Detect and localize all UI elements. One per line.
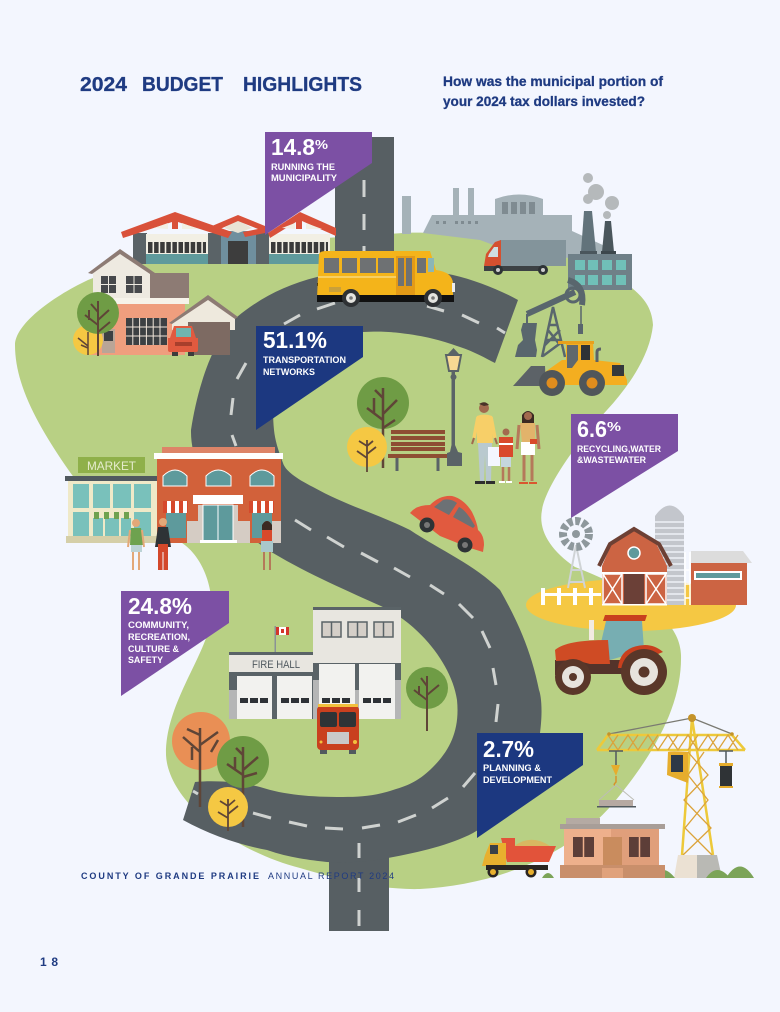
banner: 6.6% recycling, water and wastewater: &WASTEWATER	[577, 455, 646, 466]
title: BUDGET	[142, 74, 223, 96]
green dollar-shaped land	[15, 233, 681, 889]
shed	[685, 551, 752, 605]
banner: 2.7% planning and development: PLANNING &	[483, 763, 541, 774]
park bench	[388, 430, 447, 471]
shoppers at market	[128, 518, 273, 570]
family of three	[472, 402, 539, 484]
road centre dashes	[193, 180, 505, 926]
house under construction	[560, 818, 665, 878]
winding road	[183, 137, 542, 931]
market store: MARKET	[87, 459, 137, 473]
page number: 18	[40, 955, 58, 969]
yellow wheel loader	[513, 341, 627, 396]
red beetle car	[410, 496, 484, 552]
title: 2024	[80, 74, 128, 96]
banner: 24.8% community, recreation, culture and safety: CULTURE &	[128, 644, 179, 655]
banner: 14.8% running the municipality: RUNNING THE	[271, 162, 335, 173]
fire truck	[317, 704, 359, 754]
park trees	[347, 377, 409, 472]
footer report line: COUNTY OF GRANDE PRAIRIE	[81, 871, 259, 881]
banner: 6.6% recycling, water and wastewater: 6.6	[577, 416, 607, 442]
banner: 14.8% running the municipality	[265, 132, 372, 235]
banner: 51.1% transportation networks: NETWORKS	[263, 367, 315, 378]
banner: 24.8% community, recreation, culture and safety: COMMUNITY,	[128, 620, 189, 631]
title: HIGHLIGHTS	[243, 74, 362, 96]
ground bushes	[542, 866, 754, 878]
banner: 14.8% running the municipality: MUNICIPALITY	[271, 173, 338, 184]
banner: 2.7% planning and development	[477, 733, 583, 838]
street lamp	[446, 348, 462, 466]
brick shops building	[154, 447, 283, 543]
footer report line: ANNUAL REPORT 2024	[268, 871, 394, 881]
banner: 24.8% community, recreation, culture and safety: 24.8%	[128, 593, 192, 619]
banner: 14.8% running the municipality: %	[315, 137, 328, 152]
green tree by house	[77, 292, 119, 356]
title	[80, 74, 362, 96]
banner: 51.1% transportation networks: 51.1%	[263, 327, 327, 353]
red barn	[599, 529, 671, 606]
banner: 14.8% running the municipality: 14.8	[271, 134, 315, 160]
house with garage	[88, 249, 238, 355]
fire hall	[229, 607, 401, 719]
factory silhouette	[402, 188, 605, 260]
banner: 6.6% recycling, water and wastewater: RECYCLING,WATER	[577, 444, 661, 455]
oil pump jack	[515, 280, 583, 357]
banner: 24.8% community, recreation, culture and safety: RECREATION,	[128, 632, 190, 643]
banner: 24.8% community, recreation, culture and safety	[121, 591, 229, 696]
bottom-left trees	[172, 712, 269, 831]
school bus	[317, 251, 455, 307]
banner: 2.7% planning and development: DEVELOPMENT	[483, 775, 552, 786]
yellow tree by house	[73, 325, 103, 355]
community centre building	[121, 212, 336, 264]
market store	[65, 457, 159, 543]
banner: 51.1% transportation networks: TRANSPORTATION	[263, 355, 346, 366]
banner: 2.7% planning and development: 2.7%	[483, 736, 534, 762]
construction crane	[597, 714, 745, 878]
banner: 51.1% transportation networks	[256, 326, 363, 430]
canadian flag	[274, 626, 289, 652]
subtitle question: How was the municipal portion of	[443, 73, 663, 89]
farm yard	[526, 506, 752, 631]
grey delivery truck	[484, 240, 566, 275]
red tractor	[555, 615, 667, 695]
footer report line	[81, 871, 394, 881]
banner: 6.6% recycling, water and wastewater	[571, 414, 678, 518]
silo	[655, 506, 684, 605]
banner: 6.6% recycling, water and wastewater: %	[607, 419, 622, 434]
white fence	[541, 588, 601, 605]
subtitle question	[443, 73, 663, 109]
subtitle question: your 2024 tax dollars invested?	[443, 93, 645, 109]
windmill	[563, 521, 589, 588]
red car front view	[168, 326, 198, 356]
dump truck	[482, 838, 556, 878]
factory with smoke	[568, 173, 632, 290]
banner: 24.8% community, recreation, culture and safety: SAFETY	[128, 655, 164, 666]
tree beside fire hall	[406, 667, 448, 731]
fire hall: FIRE HALL	[252, 659, 300, 671]
